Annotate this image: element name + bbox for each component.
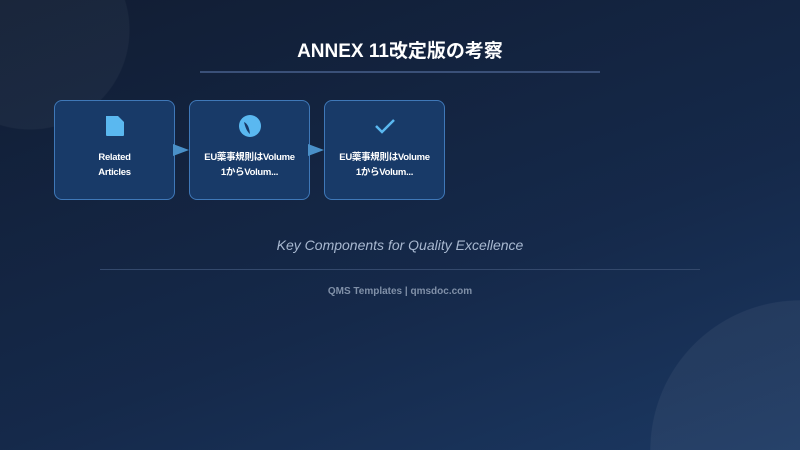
subtitle: Key Components for Quality Excellence xyxy=(277,237,523,253)
panel: related articles: Articles xyxy=(98,167,131,178)
footer: QMS Templates | qmsdoc.com xyxy=(328,286,472,297)
panel: step 2: 1からVolum... xyxy=(221,167,278,178)
icon: globe xyxy=(239,115,261,137)
arrow 1 xyxy=(173,144,189,156)
panel: step 2: EU薬事規則はVolume xyxy=(204,152,295,163)
panel: step 3: 1からVolum... xyxy=(356,167,413,178)
title: ANNEX 11改定版の考察 xyxy=(297,41,503,62)
panel: step 3 xyxy=(324,100,445,200)
icon: check xyxy=(375,119,395,134)
panel: step 2 xyxy=(189,100,310,200)
arrow 2 xyxy=(308,144,324,156)
panel: related articles xyxy=(54,100,175,200)
panel: step 3: EU薬事規則はVolume xyxy=(339,152,430,163)
icon: document xyxy=(106,116,124,136)
panel: related articles: Related xyxy=(98,152,131,163)
